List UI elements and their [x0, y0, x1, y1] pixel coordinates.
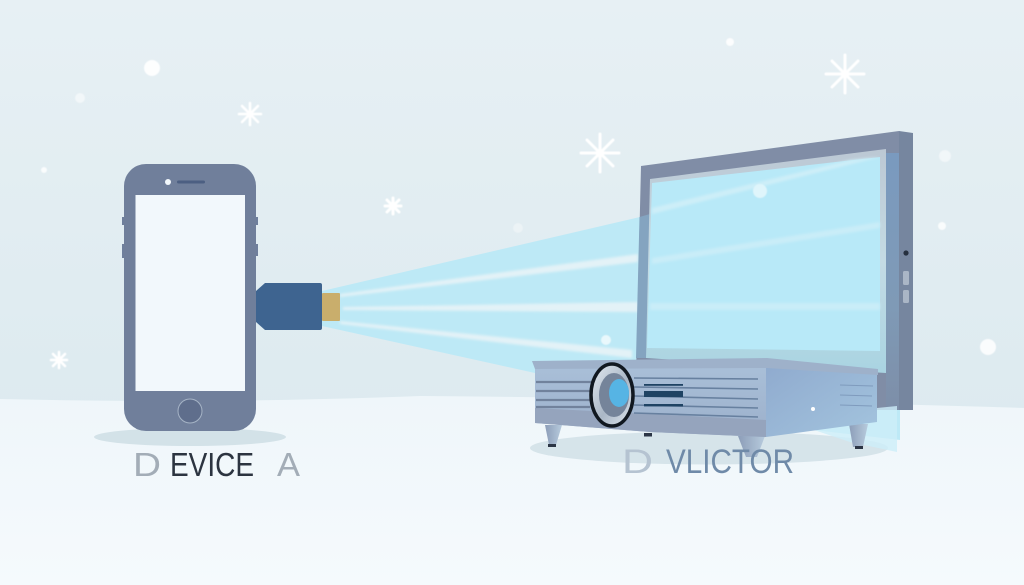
phone side buttons [122, 217, 258, 258]
label: device A: A [277, 446, 300, 483]
screen streaks [650, 157, 880, 310]
phone body [124, 164, 256, 431]
glow dot on beam [601, 335, 611, 345]
label: device A [133, 446, 300, 483]
connector [256, 283, 340, 330]
projector feet [545, 424, 868, 457]
monitor buttons [903, 250, 909, 303]
projector indicator dot [811, 407, 815, 411]
phone speaker [177, 180, 205, 184]
projector side [766, 362, 877, 437]
label: device A: EVICE [170, 446, 254, 483]
phone [122, 164, 258, 431]
projector top plate [532, 358, 878, 375]
connector tip [322, 293, 340, 321]
projector bottom band [535, 408, 766, 437]
phone home button [178, 399, 202, 423]
floor [0, 396, 1024, 585]
vents [536, 378, 873, 417]
phone camera [165, 179, 171, 185]
label: device A: D [133, 446, 161, 483]
screen glare dot [753, 184, 767, 198]
lens [591, 364, 633, 426]
projector shadow [530, 432, 888, 464]
label: projector: VLICTOR [666, 443, 794, 481]
monitor screen [647, 157, 880, 351]
monitor side panel [899, 131, 913, 410]
light beam [322, 160, 900, 440]
beam overlap on floor [790, 406, 897, 452]
label: projector [622, 443, 794, 481]
dark vent slots [644, 384, 683, 406]
label: projector: D [622, 443, 653, 481]
monitor [636, 131, 913, 410]
projector [532, 358, 878, 457]
left frame tint [636, 214, 650, 358]
beam streaks [340, 254, 638, 358]
right frame tint [886, 153, 899, 410]
projector front [535, 366, 766, 437]
snow particles [41, 38, 996, 355]
monitor frame [636, 131, 899, 410]
phone screen [136, 195, 245, 391]
monitor bezel [646, 149, 886, 373]
snowflakes [51, 55, 864, 368]
phone shadow [94, 428, 286, 446]
